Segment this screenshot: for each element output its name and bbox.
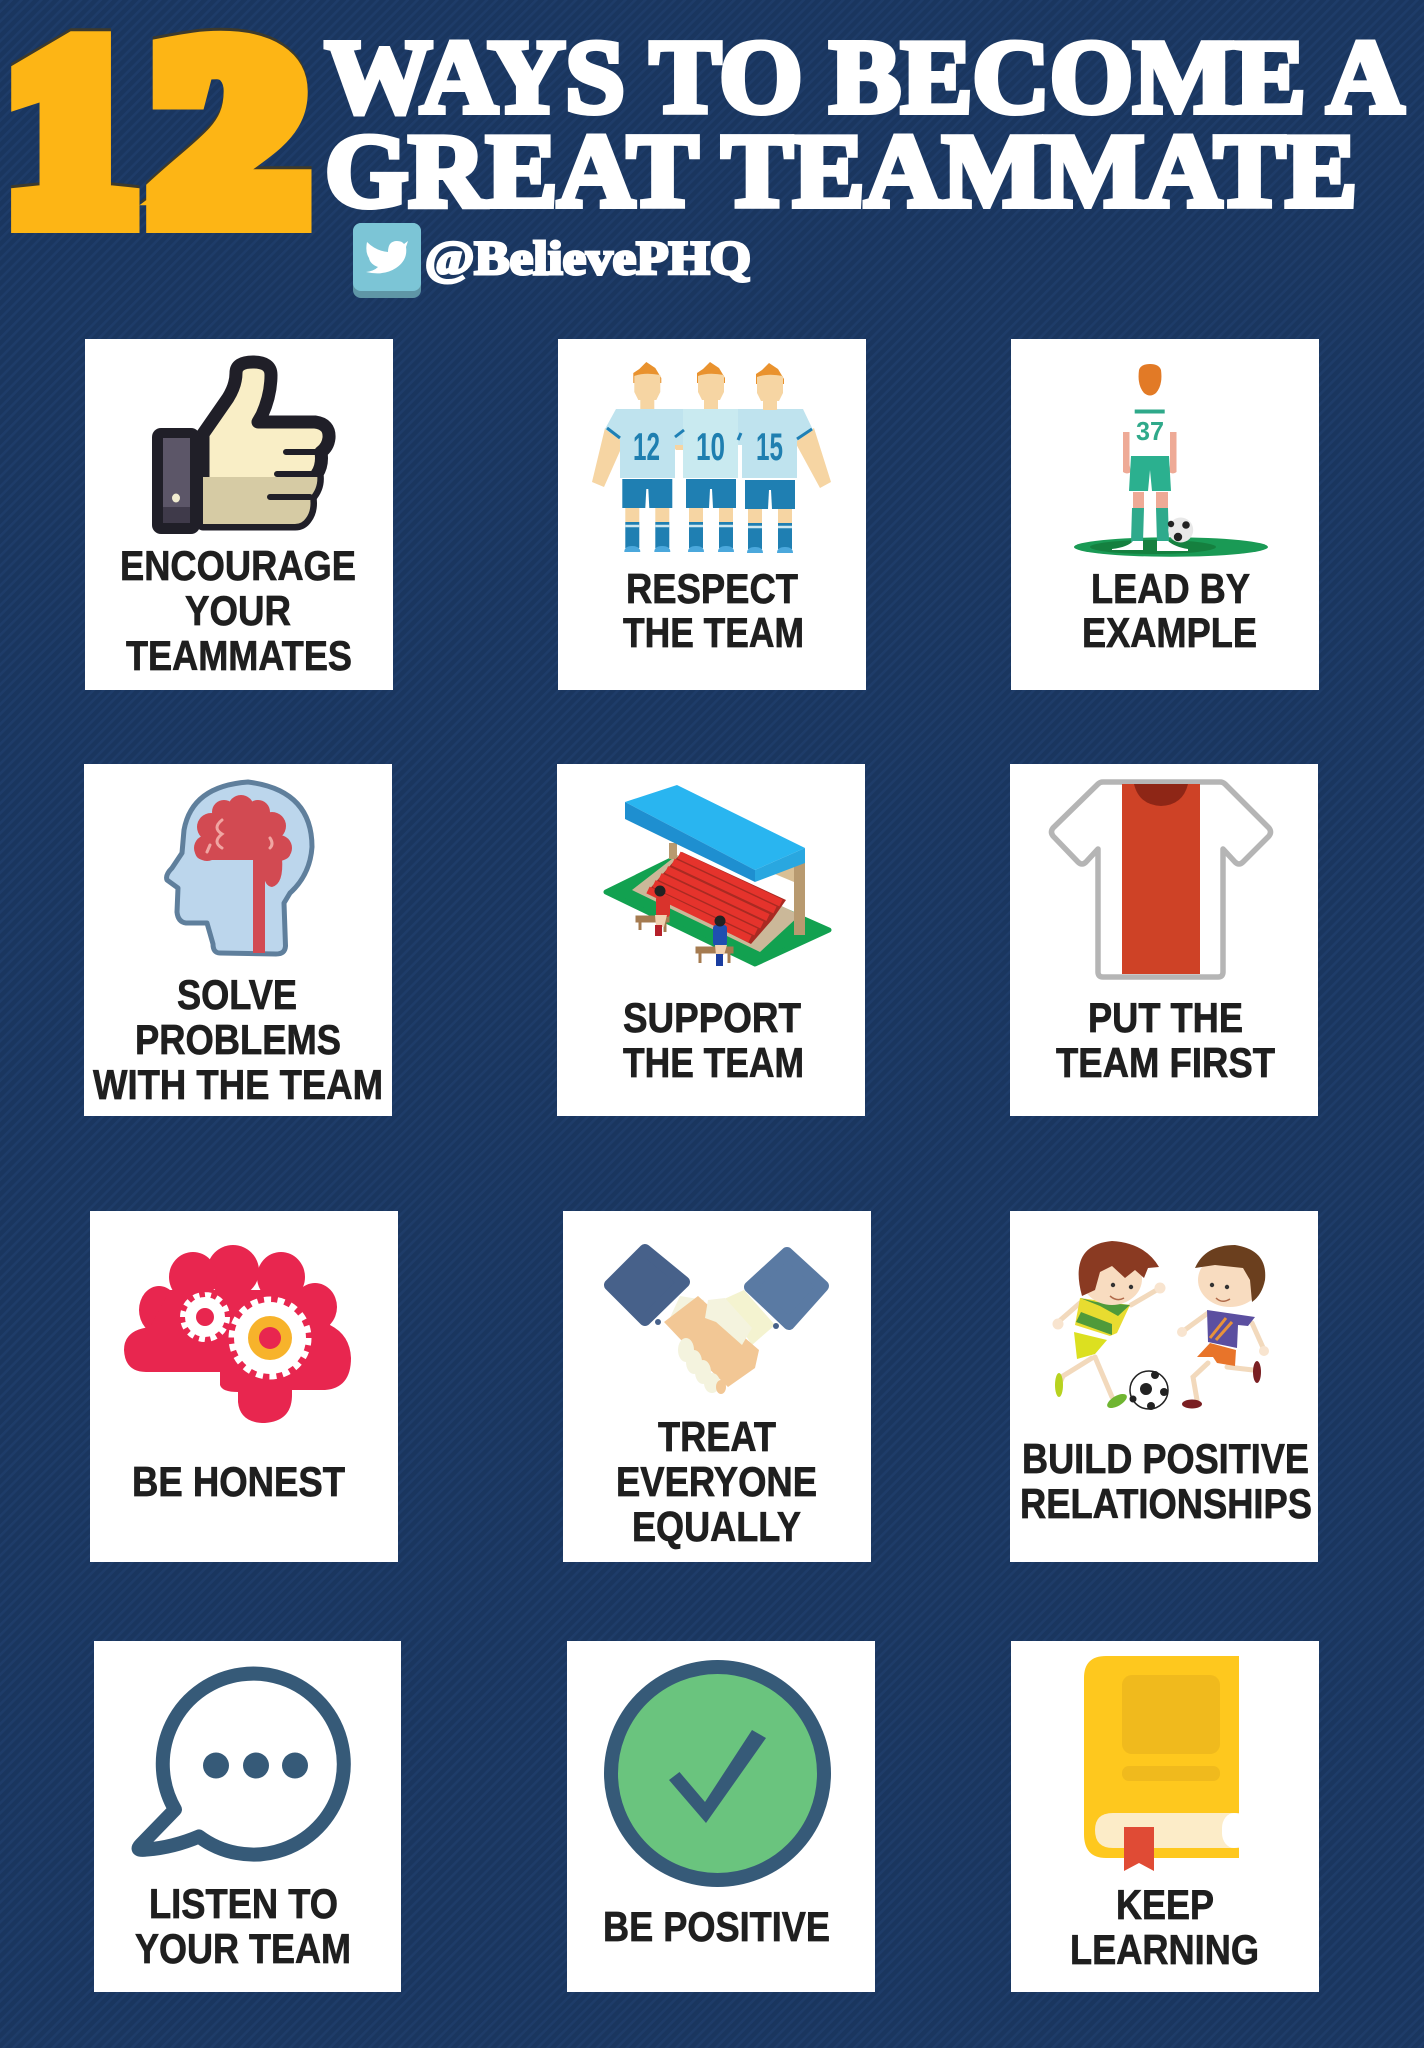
panel: build positive relationships	[1010, 1211, 1318, 1562]
panel: put the team first	[1010, 764, 1318, 1116]
panel: solve problems	[84, 764, 392, 1116]
icon: jersey	[1052, 782, 1270, 977]
label: BE HONEST	[132, 1458, 345, 1505]
panel: respect the team	[558, 339, 866, 690]
shirt numbers: 10	[696, 426, 725, 469]
label: SOLVE	[177, 971, 297, 1018]
label	[120, 542, 356, 679]
label	[1070, 1881, 1259, 1973]
label	[623, 565, 804, 656]
player 15	[745, 363, 795, 553]
label: THE TEAM	[623, 609, 804, 656]
shirt numbers	[633, 426, 783, 469]
label: YOUR	[185, 587, 291, 634]
label: LEAD BY	[1091, 565, 1250, 612]
twitter handle: @BelievePHQ	[425, 232, 751, 285]
label: EVERYONE	[616, 1458, 817, 1505]
shirt numbers: 15	[756, 426, 783, 469]
label: EXAMPLE	[1082, 609, 1257, 656]
label: YOUR TEAM	[135, 1925, 351, 1972]
kid in green	[1052, 1241, 1166, 1411]
panel: be honest	[90, 1211, 398, 1562]
icon: gears brain	[124, 1245, 351, 1423]
number 12	[9, 0, 303, 270]
label	[1020, 1435, 1312, 1527]
icon: book	[1084, 1656, 1247, 1871]
label: ENCOURAGE	[120, 542, 356, 589]
label	[623, 994, 804, 1086]
label: TEAM FIRST	[1056, 1039, 1275, 1086]
title: WAYS TO BECOME A	[325, 18, 1404, 135]
panel: lead by example	[1011, 339, 1319, 690]
label: WITH THE TEAM	[93, 1061, 383, 1108]
label	[1056, 994, 1275, 1086]
icon: player with ball	[1074, 364, 1268, 557]
panel: encourage your teammates	[85, 339, 393, 690]
label	[1082, 565, 1257, 656]
label: EQUALLY	[632, 1503, 801, 1550]
label: BE POSITIVE	[603, 1903, 830, 1950]
label: PROBLEMS	[135, 1016, 341, 1063]
label: PUT THE	[1088, 994, 1243, 1041]
player 12	[622, 362, 672, 552]
icon: three players	[592, 362, 831, 553]
label	[616, 1413, 817, 1550]
label	[135, 1880, 351, 1972]
label: SUPPORT	[623, 994, 801, 1041]
label: THE TEAM	[623, 1039, 804, 1086]
title	[325, 18, 1404, 229]
label: LISTEN TO	[149, 1880, 338, 1927]
panel: treat everyone equally	[563, 1211, 871, 1562]
icon: head with brain	[167, 782, 312, 954]
player 10	[686, 362, 736, 552]
panel: be positive	[567, 1641, 875, 1992]
number 12: 2	[155, 0, 303, 270]
label: KEEP	[1116, 1881, 1214, 1928]
shirt numbers: 12	[633, 426, 660, 469]
soccer ball	[1130, 1371, 1168, 1410]
header	[9, 0, 1404, 298]
icon: handshake	[610, 1250, 823, 1394]
label: LEARNING	[1070, 1926, 1259, 1973]
label: RELATIONSHIPS	[1020, 1480, 1312, 1527]
seated players	[637, 886, 732, 966]
label: TREAT	[658, 1413, 776, 1460]
icon: check mark	[611, 1667, 824, 1880]
panel: support the team	[557, 764, 865, 1116]
icon: player with ball: 37	[1136, 416, 1164, 446]
number 12: 1	[9, 0, 134, 270]
icon: speech bubble	[139, 1674, 344, 1855]
icon: kids playing soccer	[1052, 1241, 1269, 1411]
label	[93, 971, 383, 1108]
panel: keep learning	[1011, 1641, 1319, 1992]
icon: stadium stand	[606, 785, 829, 966]
panel: listen to your team	[94, 1641, 401, 1992]
label: RESPECT	[626, 565, 798, 612]
kid in purple	[1177, 1245, 1269, 1408]
label: BUILD POSITIVE	[1022, 1435, 1309, 1482]
icon: thumbs up	[152, 362, 329, 534]
title: GREAT TEAMMATE	[325, 112, 1357, 229]
icon: twitter	[353, 223, 421, 298]
label: TEAMMATES	[126, 632, 352, 679]
